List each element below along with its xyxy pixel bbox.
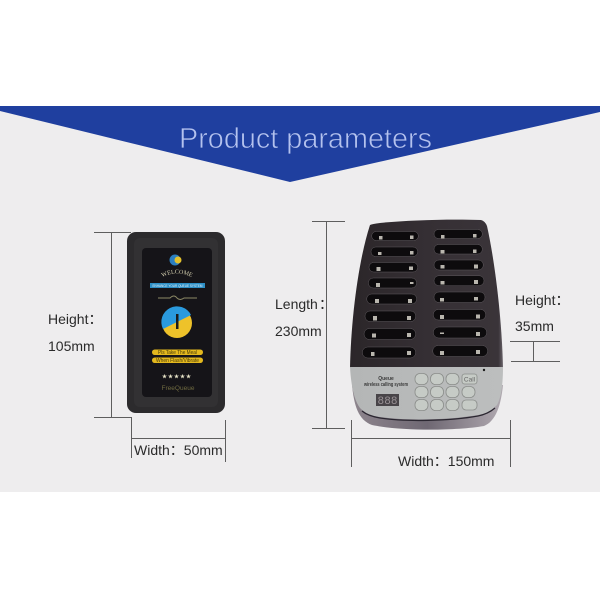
pager height label: 105mm bbox=[48, 338, 95, 354]
yellow label two: When Flash/Vibrate bbox=[156, 358, 199, 364]
base height dimension bbox=[510, 341, 560, 362]
slots left column bbox=[362, 232, 418, 358]
title: Product parameters bbox=[179, 123, 432, 155]
pager body bbox=[127, 232, 225, 413]
base length label: Length bbox=[275, 296, 318, 312]
pager logo bbox=[170, 254, 182, 266]
pager height dimension bbox=[94, 232, 131, 418]
silver panel bbox=[350, 367, 503, 419]
base width label: Width：150mm bbox=[398, 453, 494, 469]
base height label: Height： bbox=[515, 292, 569, 308]
base length label: 230mm bbox=[275, 323, 322, 339]
slots right column bbox=[433, 230, 488, 356]
base length label bbox=[275, 296, 333, 339]
call key bbox=[462, 374, 477, 384]
pager device bbox=[127, 232, 225, 413]
device label bbox=[363, 376, 408, 388]
device label: Queue bbox=[378, 376, 394, 382]
base height label bbox=[515, 292, 569, 334]
slot contacts bbox=[371, 234, 480, 356]
panel shadow bbox=[362, 408, 495, 420]
blue strip: ENHANCE YOUR QUEUE SYSTEM bbox=[152, 283, 202, 288]
base rim bbox=[352, 385, 503, 430]
pager width label: Width：50mm bbox=[134, 442, 223, 458]
base height label: 35mm bbox=[515, 318, 554, 334]
welcome text: WELCOME bbox=[161, 270, 192, 277]
keypad bbox=[415, 374, 477, 410]
calling system base bbox=[350, 220, 503, 430]
header banner bbox=[0, 106, 600, 182]
ornament bbox=[158, 296, 197, 300]
base length dimension bbox=[312, 221, 345, 428]
pager height label bbox=[48, 311, 102, 354]
indicator dot bbox=[483, 369, 485, 371]
brand: FreeQueue bbox=[162, 385, 195, 392]
pager height label: Height： bbox=[48, 311, 102, 327]
base width dimension bbox=[351, 420, 510, 467]
yellow label one: Pls Take The Meal bbox=[158, 350, 197, 356]
pager width dimension bbox=[131, 417, 226, 462]
device label: wireless calling system bbox=[363, 382, 408, 388]
dark body bbox=[350, 220, 503, 368]
background panel bbox=[0, 106, 600, 492]
base length label: ： bbox=[319, 296, 333, 312]
stars: ★★★★★ bbox=[162, 374, 192, 380]
digital display: 888 bbox=[378, 396, 398, 408]
call key: Call bbox=[464, 376, 476, 384]
dial icon bbox=[161, 306, 192, 338]
pager screen bbox=[142, 248, 212, 397]
